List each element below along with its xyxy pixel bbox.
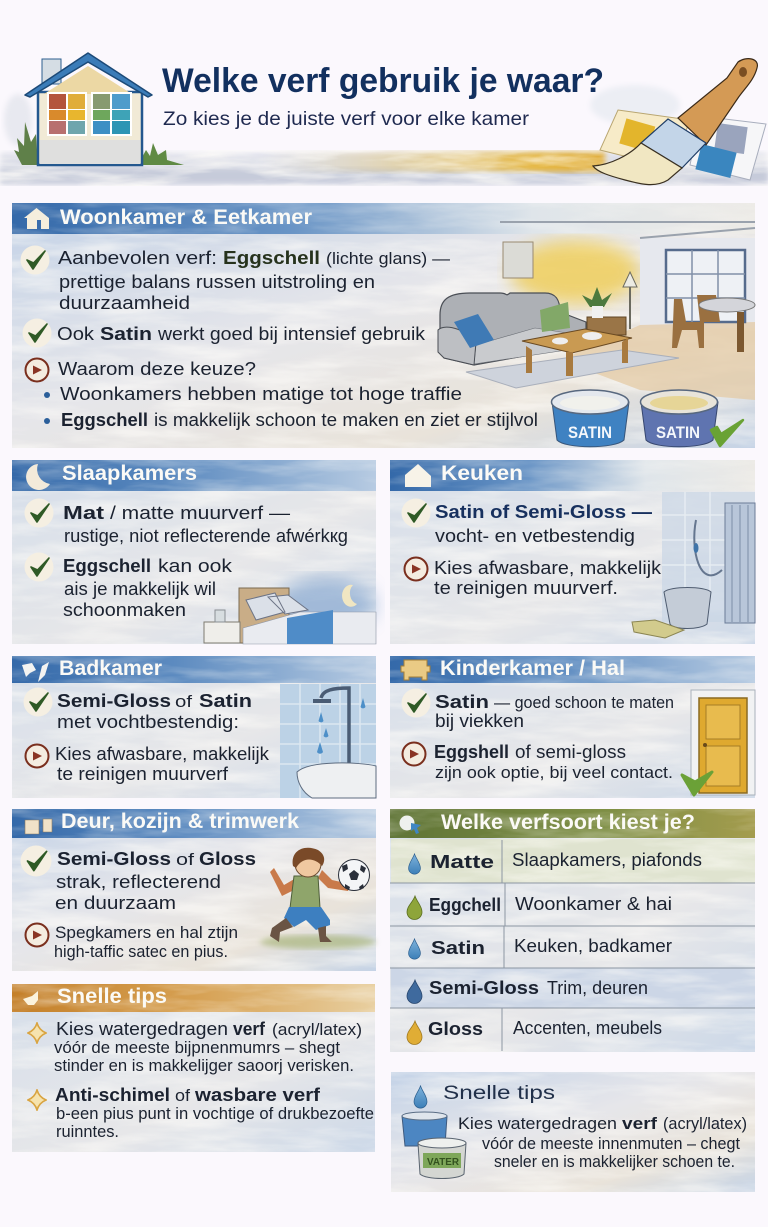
reasons list: Waarom deze keuze? [58,359,256,379]
matte text: / matte muurverf — [110,503,290,523]
satin text [22,318,426,348]
row: Eggchell: Woonkamer & hai [515,894,672,914]
icon: water drop [414,1086,427,1108]
row: Satin: Keuken, badkamer [514,936,672,956]
illustration: boy with ball [260,848,376,949]
row: Gloss [407,1018,662,1045]
row: Semi-Gloss: Semi-Gloss [429,978,539,998]
satin or semi-gloss text [402,498,652,546]
satin text [402,688,674,731]
high-traffic note: high-taffic satec en pius. [54,943,228,961]
semi-gloss text: en duurzaam [55,893,176,913]
illustration: bed [204,577,376,644]
illustration: shower and bucket [632,492,755,638]
reasons list: Eggschell [61,410,148,430]
panel: Welke verfsoort kiest je? [390,809,755,1052]
row: Semi-Gloss [407,978,648,1004]
icon: paint can satin blue [552,390,629,447]
tip text: Kies watergedragen [458,1115,617,1133]
panel: Kinderkamer / Hal [390,656,755,798]
semi-gloss text [21,846,256,913]
icon: house with box [405,464,431,487]
row: Gloss: Gloss [428,1019,483,1039]
heading: Slaapkamers [62,462,197,485]
panel: Deur, kozijn & trimwerk [12,809,376,971]
row: Eggchell: Eggchell [429,895,501,915]
icon: paint cans [402,1112,466,1178]
tip: anti-mould [28,1085,374,1141]
matte text [24,498,348,546]
illustration: shower and tub [280,684,376,798]
icon: house [14,53,184,165]
subtitle: Zo kies je de juiste verf voor elke kamer [163,108,530,130]
washable note: Kies afwasbare, makkelijk [55,744,270,764]
illustration: living room [438,222,755,400]
heading: Kinderkamer / Hal [440,657,625,680]
semi-gloss text: Satin [199,691,252,711]
panel: Slaapkamers [12,460,376,644]
tip: water-based paint [28,1019,362,1075]
icon: green check [711,420,743,446]
eggshell text: kan ook [158,556,233,576]
icon: paint can satin purple: SATIN [656,423,700,442]
icon: paint cans: VATER [427,1157,460,1168]
tip text: verf [622,1115,658,1133]
heading: Deur, kozijn & trimwerk [61,810,299,833]
header bar [12,656,376,683]
panel: Keuken [390,460,755,644]
row: Satin [409,936,672,959]
high-traffic note: Spegkamers en hal ztijn [55,924,238,942]
satin text: bij viekken [435,711,524,731]
icon: magnifier [400,816,421,834]
tip: anti-mould: Anti-schimel [55,1085,170,1105]
icon: star [23,991,38,1005]
satin or semi-gloss text: vocht- en vetbestendig [435,526,635,546]
reasons list: Woonkamers hebben matige tot hoge traffie [60,384,462,404]
icon: bone [401,660,430,680]
header banner [0,53,768,186]
row: Matte [409,850,702,874]
satin or semi-gloss text: Satin of Semi-Gloss — [435,502,652,522]
semi-gloss text: Semi-Gloss [57,849,171,869]
washable note: Kies afwasbare, makkelijk [434,558,662,578]
header bar [12,809,376,838]
washable note [26,744,270,784]
matte text: Mat [63,503,104,523]
tip: water-based paint: verf [233,1019,266,1039]
tip: water-based paint: (acryl/latex) [272,1021,362,1039]
header bar [390,460,755,491]
icon: green check [682,772,712,795]
panel: Snelle tips left [12,984,375,1152]
reasons list [26,358,538,430]
eggshell text: zijn ook optie, bij veel contact. [435,764,673,782]
tip: anti-mould: of [175,1087,190,1105]
illustration: yellow door [691,690,755,795]
row: Satin: Satin [431,938,485,958]
row: Semi-Gloss: Trim, deuren [547,978,648,998]
eggshell text: Eggshell [434,742,509,762]
recommended paint text: Eggschell [223,248,320,268]
satin text: werkt goed bij intensief gebruik [157,324,426,344]
tip: anti-mould: ruinntes. [56,1123,119,1141]
ground wash [0,85,768,186]
header bar [12,460,376,491]
icon: moon [26,464,50,490]
tip: anti-mould: b-een pius punt in vochtige of drukbezoefte [56,1105,374,1123]
heading: Snelle tips [57,985,167,1008]
header bar [390,656,755,683]
tip: water-based paint: vóór de meeste bijpnenmumrs – shegt [54,1039,340,1057]
tip: anti-mould: wasbare verf [194,1085,321,1105]
semi-gloss text: Gloss [199,849,256,869]
recommended paint text: duurzaamheid [59,293,190,313]
satin text: — goed schoon te maten [494,694,674,712]
title: Welke verf gebruik je waar? [162,62,604,100]
icon: cup and jar [25,819,52,834]
row: Eggchell [407,894,672,920]
semi-gloss text [24,688,252,732]
semi-gloss text: Semi-Gloss [57,691,171,711]
tip text: sneler en is makkelijker schoen te. [494,1153,735,1171]
eggshell text [402,742,673,782]
eggshell text: Eggschell [63,556,151,576]
panel: Badkamer [12,656,376,798]
satin text: Ook [57,324,95,344]
semi-gloss text: strak, reflecterend [56,872,221,892]
recommended paint text [20,246,451,313]
panel: Woonkamer & Eetkamer [12,203,755,448]
tip: water-based paint: stinder en is makkelijger saoorj verisken. [54,1057,354,1075]
satin text: Satin [435,692,489,712]
table rows [390,840,755,1051]
tip text [458,1115,747,1171]
heading: Welke verfsoort kiest je? [441,811,695,834]
icon: paint brush and swatches [593,59,766,185]
heading: Keuken [441,462,523,485]
matte text: rustige, niot reflecterende afwérkкg [64,526,348,546]
recommended paint text: Aanbevolen verf: [58,248,217,268]
panel: Snelle tips right [391,1072,755,1192]
recommended paint text: (lichte glans) — [326,250,451,268]
semi-gloss text: of [176,851,195,869]
recommended paint text: prettige balans russen uitstroling en [59,272,375,292]
heading: Snelle tips [443,1083,555,1104]
icon: house [24,208,49,229]
satin text: Satin [100,324,152,344]
eggshell text: of semi-gloss [515,742,626,762]
eggshell text [24,552,233,620]
tip: water-based paint: Kies watergedragen [56,1019,228,1039]
icon: shower spark [22,662,49,682]
heading: Woonkamer & Eetkamer [60,206,312,229]
semi-gloss text: met vochtbestendig: [57,712,239,732]
header bar [12,984,375,1012]
eggshell text: ais je makkelijk wil [64,579,216,599]
semi-gloss text: of [175,693,193,711]
high-traffic note [26,924,238,961]
washable note: te reinigen muurverf [57,764,229,784]
header bar [12,203,755,234]
eggshell text: schoonmaken [63,600,186,620]
row: Matte: Slaapkamers, piafonds [512,850,702,870]
row: Gloss: Accenten, meubels [513,1018,662,1038]
header bar [390,809,755,838]
tip text: (acryl/latex) [663,1115,747,1133]
row: Matte: Matte [430,852,494,872]
reasons list: is makkelijk schoon te maken en ziet er stijlvol [154,410,538,430]
washable note: te reinigen muurverf. [434,578,618,598]
heading: Badkamer [59,657,162,680]
icon: paint can satin blue: SATIN [568,423,612,442]
icon: paint can satin purple [640,390,718,447]
washable note [404,558,662,598]
tip text: vóór de meeste innenmuten – chegt [482,1135,740,1153]
